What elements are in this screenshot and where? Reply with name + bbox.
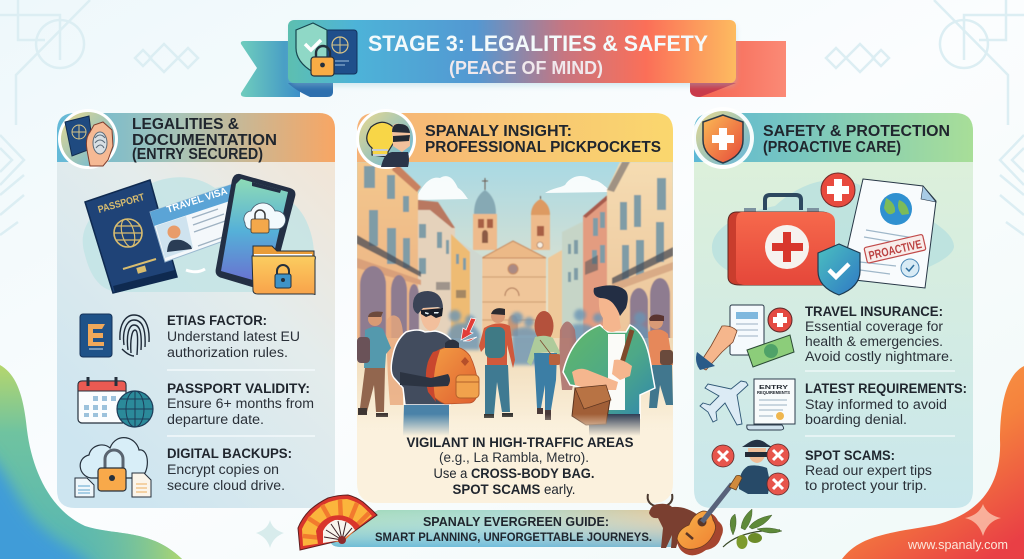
thief face (420, 308, 442, 331)
item: latest requirements: LATEST REQUIREMENTS: (805, 381, 967, 396)
panel body (357, 113, 673, 503)
trousers (589, 414, 640, 436)
caption: pickpocket advice (406, 434, 634, 497)
neck and face (598, 298, 621, 332)
panel: legalities and documentation (57, 109, 335, 508)
fade to caption (376, 415, 640, 436)
illustration: passport, visa, phone and folder (83, 174, 315, 295)
item: travel insurance: Essential coverage for (805, 319, 944, 334)
ribbon body (288, 20, 736, 83)
red cross badge (821, 173, 855, 207)
title banner (241, 20, 786, 97)
street scene illustration (357, 162, 673, 436)
panel: safety and protection (692, 107, 973, 508)
icon: guitar (677, 475, 742, 555)
caption: pickpocket advice: Use a CROSS-BODY BAG. (434, 465, 594, 481)
sparkle (965, 504, 1001, 536)
item: ETIAS factor: Understand latest EU (167, 329, 300, 344)
shirt (563, 325, 655, 418)
fan yellow band (302, 499, 372, 546)
item: digital backups: secure cloud drive. (167, 478, 285, 493)
backdrop blob (83, 177, 314, 292)
background blob: bottom left (0, 365, 190, 559)
thief gloved hand (400, 372, 450, 387)
backdrop blob (712, 180, 954, 282)
item: travel insurance (696, 304, 953, 370)
icon: fingerprint (120, 315, 149, 356)
heading: legalities and documentation: (ENTRY SECURED) (132, 146, 263, 163)
item: digital backups: DIGITAL BACKUPS: (167, 446, 292, 461)
ribbon left tail (241, 41, 300, 97)
icon: lightbulb and thief (356, 109, 416, 169)
item: digital backups: Encrypt copies on (167, 462, 279, 477)
panel header strip (357, 113, 673, 162)
heading: safety and protection: (PROACTIVE CARE) (763, 139, 901, 156)
church (473, 178, 550, 336)
travel visa card (150, 184, 240, 262)
icon: calendar and globe (78, 377, 153, 427)
stolen backpack (426, 340, 479, 404)
white tee (608, 334, 625, 410)
icon: olive branch (723, 509, 782, 549)
heading: Spanaly insight (425, 123, 661, 156)
item: spot scams: SPOT SCAMS: (805, 448, 895, 463)
sparkle bottom left (256, 520, 284, 548)
right buildings (548, 162, 673, 347)
caption: pickpocket advice: (e.g., La Rambla, Metro). (439, 450, 589, 465)
fan white ribs (323, 520, 355, 543)
item: ETIAS factor: ETIAS FACTOR: (167, 313, 267, 328)
item: spot scams: to protect your trip. (805, 478, 927, 493)
thief with mask (391, 291, 479, 436)
item: spot scams: Read our expert tips (805, 463, 932, 478)
sky (357, 162, 673, 342)
proactive document (843, 179, 936, 288)
tourist with red jacket and backpack (479, 308, 515, 418)
heading: safety and protection: SAFETY & PROTECTION (763, 123, 950, 140)
icon: Spanish fan (298, 495, 377, 550)
item: passport validity: departure date. (167, 412, 264, 427)
illustration: first aid kit and document (712, 173, 954, 295)
ribbon right tail (690, 41, 786, 97)
icon: ETIAS card (80, 314, 112, 357)
passport: PASSPORT (97, 192, 146, 216)
footer heading: SPANALY EVERGREEN GUIDE: (423, 515, 609, 529)
item: latest requirements: boarding denial. (805, 412, 907, 427)
icon: cloud padlock and documents (75, 438, 151, 497)
subtitle text: (PEACE OF MIND) (449, 58, 603, 78)
icon: bull (648, 494, 698, 548)
icon: scammer with warning marks (712, 440, 789, 495)
forearm (572, 369, 618, 390)
icon: requirements scroll: REQUIREMENTS (757, 390, 790, 395)
icon: requirements scroll: ENTRY (759, 385, 789, 391)
item: ETIAS factor (80, 313, 300, 360)
clouds (415, 176, 612, 200)
panel: Spanaly insight (356, 109, 673, 503)
banner strip (330, 510, 672, 547)
passport (85, 180, 177, 293)
item: passport validity (78, 377, 314, 427)
heading: Spanaly insight: SPANALY INSIGHT: (425, 123, 572, 140)
icon: shield passport and padlock (296, 23, 357, 76)
traveler with cross-body bag (563, 285, 655, 436)
maroon tourist (559, 322, 578, 390)
arrow to phone (186, 269, 205, 272)
item: digital backups (75, 438, 292, 497)
panel header strip (694, 113, 973, 162)
hair (594, 285, 628, 316)
panel header strip (57, 113, 335, 162)
travel visa card: TRAVEL VISA (166, 186, 229, 216)
heading: legalities and documentation (132, 116, 277, 163)
distant crowd (447, 309, 650, 365)
item: travel insurance: Avoid costly nightmare. (805, 349, 953, 364)
check shield (818, 244, 860, 295)
heading: safety and protection (763, 123, 950, 156)
title text: STAGE 3: LEGALITIES & SAFETY (368, 31, 708, 56)
icon: shield with cross (692, 107, 754, 169)
thief mask (421, 308, 443, 318)
thief trousers (403, 405, 449, 436)
hand on strap (612, 360, 632, 380)
fan outer edge (298, 495, 377, 550)
caption: pickpocket advice: VIGILANT IN HIGH-TRAFFIC AREAS (406, 434, 634, 450)
tourist left (357, 312, 403, 417)
background blob: bottom right (842, 366, 1024, 559)
heading: legalities and documentation: LEGALITIES & (132, 116, 239, 133)
caption: pickpocket advice: SPOT SCAMS early. (452, 481, 576, 497)
decorative corner pattern top right (826, 0, 1024, 235)
smartphone (216, 174, 295, 290)
item: latest requirements: Stay informed to avoid (805, 397, 947, 412)
thief torso (391, 330, 455, 405)
item: travel insurance: health & emergencies. (805, 334, 943, 349)
tourist right (648, 315, 673, 408)
item: passport validity: PASSPORT VALIDITY: (167, 381, 310, 396)
heading: legalities and documentation: DOCUMENTATION (132, 132, 277, 149)
fan pivot (338, 536, 346, 544)
fan orange stripes (303, 500, 369, 540)
footer banner (330, 510, 672, 547)
panel body (694, 113, 973, 508)
item: latest requirements (700, 379, 967, 430)
icon: insurance form, hand and money (696, 305, 794, 370)
left buildings (357, 162, 482, 345)
red warning arrow (461, 318, 477, 341)
item: ETIAS factor: authorization rules. (167, 345, 288, 360)
ground (357, 338, 673, 412)
item: passport validity: Ensure 6+ months from (167, 396, 314, 411)
footer tagline: SMART PLANNING, UNFORGETTABLE JOURNEYS. (375, 530, 652, 544)
first aid kit (728, 195, 835, 285)
thief beanie (413, 291, 443, 314)
icon: airplane (700, 381, 748, 425)
decorative corner pattern top left (0, 0, 198, 235)
proactive document: PROACTIVE (867, 237, 923, 263)
woman walking away (527, 311, 560, 420)
heading: Spanaly insight: PROFESSIONAL PICKPOCKETS (425, 139, 661, 156)
item: travel insurance: TRAVEL INSURANCE: (805, 304, 943, 319)
background tourists (357, 308, 673, 420)
icon: passport and fingerprint hand (58, 109, 118, 169)
item: spot scams (712, 440, 932, 495)
panel body (57, 113, 335, 508)
satchel (572, 388, 610, 425)
fan inner red band (316, 515, 360, 544)
icon: requirements scroll (747, 379, 795, 430)
website url: www.spanaly.com (907, 538, 1008, 552)
strap (620, 329, 634, 362)
locked folder (252, 246, 315, 295)
